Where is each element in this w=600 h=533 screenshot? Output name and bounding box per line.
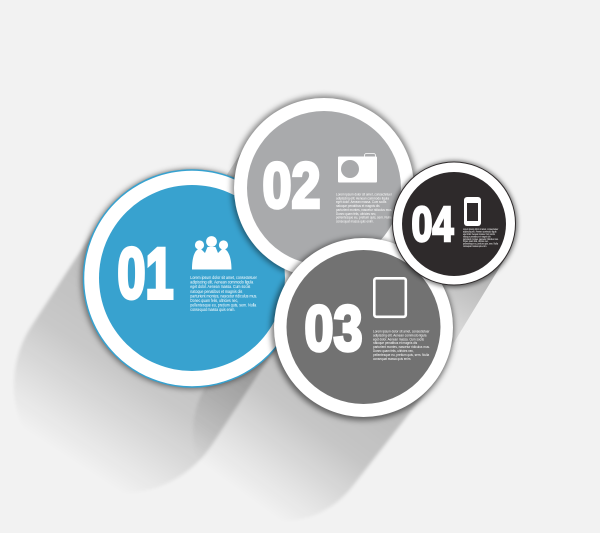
text block 04: pellentesque eu, pretium quis, sem. Nulla xyxy=(463,243,498,246)
text block 01: eget dolor. Aenean massa. Cum sociis xyxy=(190,284,251,289)
text block 01: natoque penatibus et magnis dis xyxy=(190,289,243,294)
number 04: 04 xyxy=(412,198,454,252)
long shadow: circle 3 xyxy=(282,328,363,432)
text block 04: parturient montes, nascetur ridiculus mus. xyxy=(463,238,499,241)
panel: circle 04 xyxy=(390,160,518,288)
circle 04 fill xyxy=(402,172,506,276)
text block 01: Lorem ipsum dolor sit amet, consectetuer xyxy=(190,275,257,280)
text block 04: natoque penatibus et magnis dis xyxy=(463,235,491,238)
long shadow: circle 1 xyxy=(122,278,192,385)
number 01: 01 xyxy=(118,235,174,314)
text block 04: consequat massa quis enim. xyxy=(463,245,487,248)
text block 02: pellentesque eu, pretium quis, sem. Nulla xyxy=(336,216,392,220)
text block 02 xyxy=(336,192,392,224)
circle 01 ring xyxy=(84,170,300,387)
text block 02: consequat massa quis enim. xyxy=(336,220,374,224)
panel: circle 03 xyxy=(271,238,454,420)
long shadow: circle 2 xyxy=(262,188,324,285)
text block 02: Donec quam felis, ultricies nec, xyxy=(336,212,376,216)
circle 02 ring xyxy=(234,98,414,278)
circle 04 edge shadow xyxy=(390,160,518,288)
circle 02 edge shadow xyxy=(232,96,416,280)
circle 03 fill xyxy=(286,250,440,404)
circle 01 edge shadow xyxy=(81,169,301,389)
icon: phone xyxy=(464,197,481,226)
text block 02: natoque penatibus et magnis dis xyxy=(336,204,380,208)
icon: people xyxy=(192,236,232,270)
text block 01: parturient montes, nascetur ridiculus mus. xyxy=(190,293,257,298)
text block 01: adipiscing elit. Aenean commodo ligula xyxy=(190,280,254,285)
text block 03: natoque penatibus et magnis dis xyxy=(373,340,417,345)
text block 03: eget dolor. Aenean massa. Cum sociis xyxy=(373,336,424,341)
circle 04 ring xyxy=(392,162,516,285)
circle 01 fill xyxy=(99,185,285,371)
text block 01: pellentesque eu, pretium quis, sem. Nulla xyxy=(190,303,257,308)
circle 03 ring xyxy=(274,238,453,417)
text block 02: adipiscing elit. Aenean commodo ligula xyxy=(336,196,390,200)
panel: circle 01 xyxy=(81,169,301,389)
text block 03 xyxy=(373,328,430,361)
circle 03 edge shadow xyxy=(271,238,454,420)
text block 02: parturient montes, nascetur ridiculus mus. xyxy=(336,208,392,212)
circle 02 fill xyxy=(247,111,401,265)
text block 03: Lorem ipsum dolor sit amet, consectetuer xyxy=(373,329,430,334)
text block 03: Donec quam felis, ultricies nec, xyxy=(373,348,414,353)
text block 03: adipiscing elit. Aenean commodo ligula xyxy=(373,332,427,337)
text block 03: consequat massa quis enim. xyxy=(373,356,411,361)
panel: circle 02 xyxy=(232,96,416,280)
icon: camera xyxy=(338,154,377,182)
text block 02: eget dolor. Aenean massa. Cum sociis xyxy=(336,200,386,204)
text block 04: adipiscing elit. Aenean commodo ligula xyxy=(463,230,497,233)
text block 04: eget dolor. Aenean massa. Cum sociis xyxy=(463,233,495,236)
text block 04 xyxy=(463,228,499,248)
icon: tablet xyxy=(374,278,406,317)
text block 02: Lorem ipsum dolor sit amet, consectetuer xyxy=(336,192,392,197)
number 02: 02 xyxy=(262,149,320,221)
text block 01 xyxy=(190,275,257,312)
text block 04: Lorem ipsum dolor sit amet, consectetuer xyxy=(463,228,498,231)
long shadow: circle 4 xyxy=(392,224,454,326)
text block 03: parturient montes, nascetur ridiculus mus. xyxy=(373,344,430,349)
text block 01: consequat massa quis enim. xyxy=(190,307,235,312)
text block 03: pellentesque eu, pretium quis, sem. Nulla xyxy=(373,352,430,357)
number 03: 03 xyxy=(304,292,362,364)
text block 01: Donec quam felis, ultricies nec, xyxy=(190,298,238,303)
text block 04: Donec quam felis, ultricies nec, xyxy=(463,240,489,243)
